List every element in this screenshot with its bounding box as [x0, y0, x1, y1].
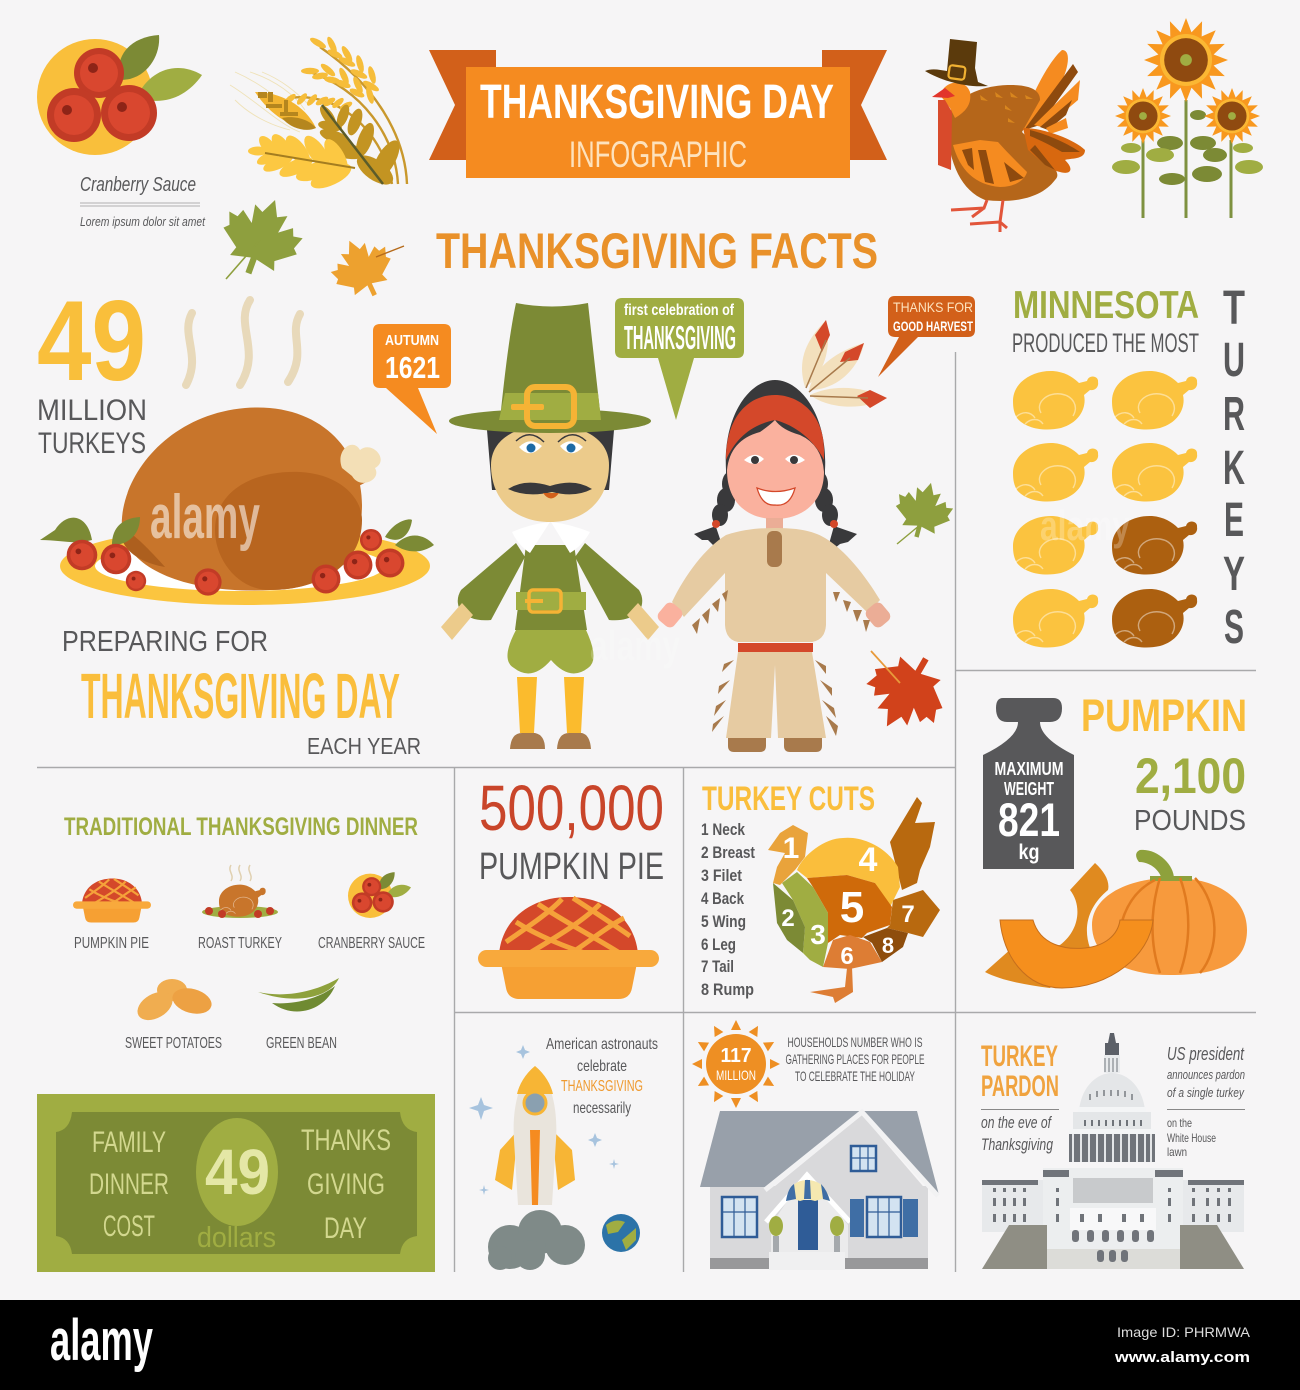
panel: turkey cuts: 5 Wing — [701, 912, 746, 931]
icon: maximum weight: 821 — [998, 793, 1060, 846]
stat: 49 million turkeys: 49 — [37, 278, 146, 405]
callout: autumn 1621: 1621 — [385, 350, 440, 385]
stat: 49 million turkeys: MILLION — [37, 394, 147, 427]
callout: first celebration: first celebration of — [624, 302, 735, 319]
icon: red maple leaf — [853, 639, 960, 746]
icon: green maple leaf — [212, 187, 312, 287]
banner: family dinner cost: DINNER — [89, 1168, 169, 1201]
title banner — [429, 50, 887, 178]
title banner: INFOGRAPHIC — [569, 134, 747, 175]
panel: turkey cuts: 4 Back — [701, 889, 744, 908]
footer bar: Image ID: PHRMWA — [1117, 1324, 1251, 1340]
text: astronauts: American astronauts — [546, 1036, 658, 1053]
vertical word: turkeys: S — [1224, 601, 1244, 654]
vertical word: turkeys: T — [1223, 282, 1245, 335]
panel: turkey cuts: 7 — [901, 901, 915, 928]
callout: thanks for good harvest: THANKS FOR — [893, 299, 973, 315]
watermarks — [150, 483, 1130, 669]
illustration: rocket — [488, 1066, 585, 1270]
callout: first celebration — [615, 298, 744, 420]
text: turkey pardon: on the eve of — [981, 1113, 1053, 1132]
vertical word: turkeys: E — [1224, 494, 1244, 547]
icon: sun 117 million: 117 — [720, 1045, 752, 1067]
stat: pumpkin 2100 pounds: 2,100 — [1135, 748, 1246, 804]
illustration: house — [700, 1111, 939, 1270]
icon: cranberry sauce with caption: Cranberry Sauce — [80, 174, 196, 196]
heading: minnesota: MINNESOTA — [1013, 284, 1199, 327]
title banner: THANKSGIVING DAY — [480, 76, 834, 129]
text: us president: White House — [1167, 1131, 1216, 1145]
item: sweet potatoes: SWEET POTATOES — [125, 1035, 222, 1052]
text: preparing for thanksgiving day each year: PREPARING FOR — [62, 626, 268, 658]
panel: turkey cuts: 2 Breast — [701, 843, 755, 862]
icon: sunflowers — [1112, 18, 1263, 218]
callout: thanks for good harvest: GOOD HARVEST — [893, 318, 973, 334]
illustration: roast turkey platter — [40, 407, 434, 605]
icon: cranberry sauce with caption — [37, 35, 206, 229]
illustration: pilgrim — [441, 303, 659, 749]
heading: thanksgiving facts: THANKSGIVING FACTS — [436, 223, 878, 279]
footer bar: alamy — [50, 1308, 153, 1373]
item: green bean: GREEN BEAN — [266, 1035, 337, 1052]
text: us president: US president — [1167, 1044, 1245, 1064]
stat: 500000 pumpkin pie: 500,000 — [479, 772, 664, 844]
vertical word: turkeys: K — [1223, 442, 1245, 495]
icon: pilgrim turkey — [925, 39, 1085, 232]
icon: sun 117 million: MILLION — [716, 1067, 756, 1083]
illustration: capitol — [982, 1033, 1244, 1269]
panel: turkey cuts: 5 — [840, 883, 864, 932]
text: turkey pardon — [981, 1040, 1059, 1154]
callout: thanks for good harvest — [878, 296, 975, 377]
item: pumpkin pie — [73, 879, 151, 952]
panel: turkey cuts: 3 Filet — [701, 866, 742, 885]
text: us president: on the — [1167, 1116, 1192, 1130]
panel: turkey cuts: 1 Neck — [701, 820, 745, 839]
icon: maximum weight: WEIGHT — [1004, 779, 1054, 799]
panel: turkey cuts: 3 — [810, 919, 826, 950]
item: roast turkey — [198, 865, 282, 952]
panel: turkey cuts: 6 Leg — [701, 935, 736, 954]
text: turkey pardon: Thanksgiving — [981, 1135, 1053, 1154]
illustration: native american girl — [655, 320, 893, 752]
panel: turkey cuts: 4 — [859, 841, 878, 879]
text: preparing for thanksgiving day each year: EACH YEAR — [307, 733, 421, 759]
text: preparing for thanksgiving day each year: THANKSGIVING DAY — [81, 660, 400, 732]
vertical word: turkeys: Y — [1223, 548, 1245, 601]
stat: pumpkin 2100 pounds — [1081, 690, 1247, 837]
stat: pumpkin 2100 pounds: PUMPKIN — [1081, 690, 1247, 741]
text: turkey pardon: PARDON — [981, 1070, 1059, 1103]
watermarks: alamy — [150, 483, 260, 552]
panel: turkey cuts — [701, 780, 940, 1003]
callout: autumn 1621: AUTUMN — [385, 332, 439, 349]
banner: family dinner cost: THANKS — [301, 1124, 391, 1157]
text: astronauts — [546, 1036, 658, 1117]
text: us president: of a single turkey — [1167, 1085, 1245, 1100]
icon: sun 117 million — [692, 1020, 780, 1108]
stat: 500000 pumpkin pie: PUMPKIN PIE — [479, 846, 664, 888]
steam — [186, 300, 300, 385]
item: roast turkey: ROAST TURKEY — [198, 935, 282, 952]
icon: small green leaf — [889, 476, 958, 544]
panel: turkey cuts: 1 — [783, 832, 799, 865]
banner: family dinner cost: FAMILY — [92, 1126, 166, 1159]
text: astronauts: THANKSGIVING — [561, 1078, 643, 1095]
stat: 49 million turkeys — [37, 278, 147, 460]
text: THANKSGIVING — [624, 319, 736, 356]
text: preparing for thanksgiving day each year — [62, 626, 421, 759]
text: us president: lawn — [1167, 1145, 1187, 1159]
item: pumpkin pie: PUMPKIN PIE — [74, 935, 149, 952]
panel: turkey cuts: 7 Tail — [701, 957, 734, 976]
banner: family dinner cost: COST — [103, 1210, 155, 1243]
vertical word: turkeys — [1223, 282, 1245, 654]
text: us president — [1167, 1044, 1245, 1159]
icon: orange maple leaf — [322, 228, 404, 308]
icon: maximum weight: kg — [1018, 841, 1040, 864]
icon: maximum weight — [983, 698, 1074, 869]
text: households: TO CELEBRATE THE HOLIDAY — [795, 1068, 915, 1084]
text: households — [786, 1034, 924, 1084]
panel: turkey cuts: 6 — [840, 943, 854, 970]
icon: stars — [469, 1045, 619, 1195]
vertical word: turkeys: U — [1223, 334, 1245, 387]
callout: autumn 1621 — [373, 324, 451, 434]
text: households: GATHERING PLACES FOR PEOPLE — [786, 1051, 924, 1067]
heading: minnesota — [1012, 284, 1199, 358]
icon: maximum weight: MAXIMUM — [994, 759, 1064, 779]
text: turkey pardon: TURKEY — [981, 1040, 1058, 1073]
vertical word: turkeys: R — [1223, 388, 1245, 441]
text: astronauts: necessarily — [573, 1100, 631, 1117]
footer bar — [0, 1300, 1300, 1390]
panel: turkey cuts: 8 Rump — [701, 980, 754, 999]
item: cranberry sauce: CRANBERRY SAUCE — [318, 935, 425, 952]
stat: 49 million turkeys: TURKEYS — [38, 427, 146, 460]
icon: cranberry sauce with caption: Lorem ipsum dolor sit amet — [80, 214, 206, 229]
banner: family dinner cost: DAY — [324, 1212, 367, 1245]
banner: family dinner cost: GIVING — [307, 1168, 385, 1201]
panel: turkey cuts: 2 — [781, 905, 795, 932]
watermarks: alamy — [590, 622, 680, 669]
text: us president: announces pardon — [1167, 1067, 1245, 1082]
watermarks: alamy — [1040, 502, 1130, 549]
icon: earth — [602, 1214, 640, 1252]
pictogram: turkey counts — [1013, 371, 1197, 648]
banner: family dinner cost: 49 — [205, 1136, 270, 1208]
icon: wheat bundle — [230, 35, 407, 193]
text: astronauts: celebrate — [577, 1058, 627, 1075]
illustration: pumpkin and slices — [985, 850, 1247, 988]
banner: family dinner cost — [37, 1094, 435, 1272]
panel: turkey cuts: 8 — [882, 933, 894, 958]
banner: family dinner cost: dollars — [197, 1222, 276, 1254]
text: households: HOUSEHOLDS NUMBER WHO IS — [788, 1034, 922, 1050]
item: sweet potatoes — [125, 979, 222, 1052]
item: green bean — [258, 978, 339, 1052]
heading: traditional thanksgiving dinner: TRADITIONAL THANKSGIVING DINNER — [64, 813, 418, 841]
footer bar: www.alamy.com — [1114, 1349, 1250, 1366]
panel: turkey cuts: TURKEY CUTS — [702, 780, 875, 818]
stat: 500000 pumpkin pie — [478, 772, 664, 999]
item: cranberry sauce — [318, 872, 425, 952]
stat: pumpkin 2100 pounds: POUNDS — [1134, 805, 1246, 837]
